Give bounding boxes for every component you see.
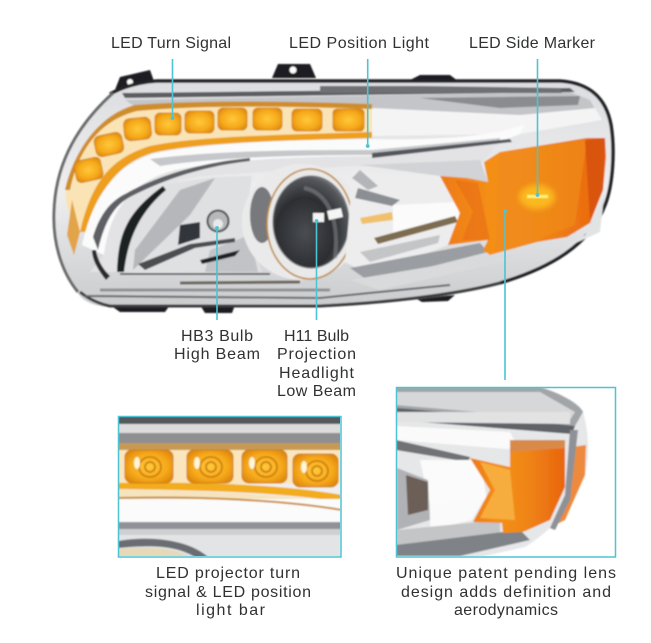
label: HB3 Bulb High Beam — [174, 328, 260, 363]
turn signal band — [65, 102, 372, 232]
label: LED Position Light: LED Position Light — [289, 35, 430, 52]
label: HB3 Bulb High Beam: High Beam — [174, 346, 260, 363]
amber lens — [470, 448, 565, 533]
inner chrome sweep — [90, 142, 500, 272]
label: HB3 Bulb High Beam: HB3 Bulb — [181, 328, 253, 345]
caption: LED projector — [145, 565, 311, 619]
caption: patent pending lens: Unique patent pending lens — [396, 565, 616, 582]
inset: side lens detail — [396, 387, 616, 557]
lamp housing — [53, 80, 614, 307]
high beam reflector — [117, 176, 262, 274]
inset LEDs — [125, 450, 338, 487]
side marker lens — [440, 138, 606, 255]
label: LED Turn Signal: LED Turn Signal — [111, 35, 231, 52]
caption: LED projector: signal & LED position — [145, 584, 311, 601]
HB3 bulb — [208, 210, 228, 232]
position light bar — [82, 124, 525, 255]
label: H11 Bulb Projection Headlight Low Beam: Projection — [277, 346, 356, 363]
caption: patent pending lens: aerodynamics — [454, 602, 558, 619]
line: side marker — [536, 59, 539, 197]
chrome fins — [345, 160, 520, 290]
line: position light — [366, 59, 370, 148]
trim lines under reflector — [120, 273, 270, 275]
label: H11 Bulb Projection Headlight Low Beam: H11 Bulb — [284, 328, 349, 345]
right corner white — [560, 188, 605, 250]
headlight photo — [53, 64, 614, 313]
caption: patent pending lens: design adds definition and — [401, 584, 611, 601]
caption: LED projector: LED projector turn — [156, 565, 300, 582]
caption: patent pending lens — [396, 565, 616, 619]
caption: LED projector: light bar — [196, 602, 266, 619]
label: LED Side Marker: LED Side Marker — [469, 35, 596, 52]
projector lens — [242, 164, 362, 280]
bottom edge — [80, 283, 500, 306]
line: lens inset — [503, 209, 507, 380]
line: H11 bulb — [315, 219, 318, 320]
callout lines — [171, 59, 539, 380]
LED turn signal lamps — [73, 108, 364, 183]
top chrome strips — [125, 92, 600, 118]
amber left accent — [67, 200, 80, 255]
label: H11 Bulb Projection Headlight Low Beam — [277, 328, 356, 400]
label: H11 Bulb Projection Headlight Low Beam: Headlight — [279, 365, 355, 382]
top and right dark edge — [110, 81, 613, 283]
inset: LED projector detail — [118, 416, 342, 558]
mounting tabs — [110, 64, 458, 313]
line: HB3 bulb — [215, 226, 219, 320]
left ribbed edge — [54, 93, 113, 292]
line: turn signal — [171, 59, 174, 120]
label: H11 Bulb Projection Headlight Low Beam: Low Beam — [277, 383, 356, 400]
